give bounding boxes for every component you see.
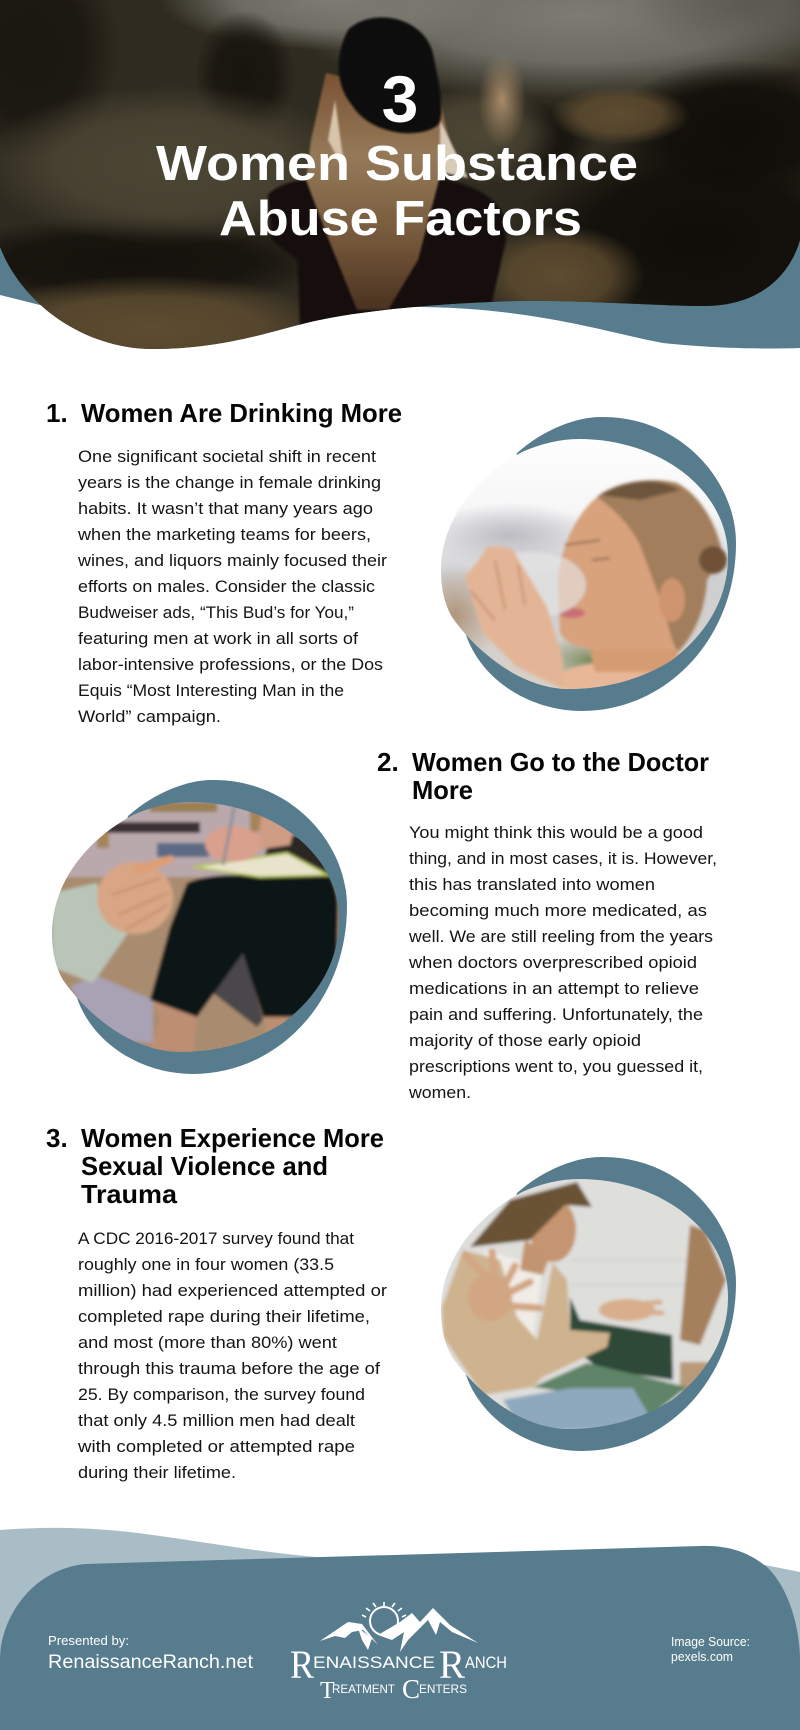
text block: factor 1 body: labor-intensive professions, or the Dos <box>78 655 383 674</box>
text block: factor 3 body: during their lifetime. <box>78 1463 236 1482</box>
logo wordmark: ENAISSANCE <box>313 1653 435 1672</box>
text block: factor 3 body: roughly one in four women (33.5 <box>78 1255 334 1274</box>
logo wordmark <box>290 1642 507 1704</box>
text block: factor 1 body <box>77 447 387 726</box>
icon: sun and mountains <box>320 1602 478 1652</box>
title: Abuse Factors <box>219 192 582 246</box>
text block: factor 1 body: habits. It wasn’t that many years ago <box>78 499 373 518</box>
heading: women go to the doctor more <box>377 747 709 805</box>
heading: women go to the doctor more: Women Go to the Doctor <box>412 747 709 777</box>
heading: women experience more sexual violence and trauma: Women Experience More <box>81 1123 384 1153</box>
logo wordmark: C <box>402 1674 420 1704</box>
teal wave behind header <box>0 200 800 348</box>
footer panel <box>0 1546 800 1730</box>
text block: factor 1 body: when the marketing teams for beers, <box>77 525 371 544</box>
text block: factor 1 body: World” campaign. <box>78 707 221 726</box>
title <box>156 62 638 246</box>
text block: factor 3 body: A CDC 2016-2017 survey found that <box>78 1229 354 1248</box>
heading: women experience more sexual violence and trauma: Sexual Violence and <box>81 1151 328 1181</box>
logo: Renaissance Ranch Treatment Centers <box>290 1602 507 1704</box>
text block: factor 2 body: majority of those early opioid <box>409 1031 641 1050</box>
heading: women are drinking more: 1. <box>46 398 68 428</box>
text block: factor 1 body: Budweiser ads, “This Bud’s for You,” <box>78 603 354 622</box>
text block: factor 2 body: when doctors overprescribed opioid <box>408 953 697 972</box>
text block: factor 2 body: well. We are still reeling from the years <box>408 927 713 946</box>
text block: factor 3 body: completed rape during their lifetime, <box>78 1307 370 1326</box>
panel: factor 3 text <box>46 1123 387 1482</box>
presented by text: Presented by: <box>48 1633 129 1648</box>
logo wordmark: ANCH <box>465 1653 507 1672</box>
text block: factor 3 body: with completed or attempted rape <box>77 1437 355 1456</box>
text block: factor 1 body: One significant societal shift in recent <box>78 447 376 466</box>
panel: factor 1 text <box>46 398 402 726</box>
woman <box>268 178 506 330</box>
text block: factor 2 body: pain and suffering. Unfortunately, the <box>409 1005 703 1024</box>
text block: factor 3 body: and most (more than 80%) went <box>78 1333 337 1352</box>
image: distressed woman on green sofa <box>430 1157 740 1451</box>
heading: women go to the doctor more: 2. <box>377 747 399 777</box>
image: woman drinking water <box>441 417 736 711</box>
text block: factor 2 body: thing, and in most cases, it is. However, <box>409 849 717 868</box>
text block: factor 2 body <box>408 823 717 1102</box>
text block: factor 2 body: medications in an attempt to relieve <box>409 979 699 998</box>
text block: factor 2 body: becoming much more medicated, as <box>409 901 707 920</box>
image: therapist writing notes with client <box>40 780 350 1074</box>
text block: factor 2 body: this has translated into women <box>409 875 655 894</box>
text block: factor 3 body: million) had experienced attempted or <box>78 1281 387 1300</box>
text block: factor 1 body: efforts on males. Consider the classic <box>78 577 376 596</box>
title: Women Substance <box>156 137 638 191</box>
heading: women go to the doctor more: More <box>412 775 473 805</box>
text block: factor 2 body: You might think this would be a good <box>409 823 703 842</box>
text block: factor 1 body: years is the change in female drinking <box>78 473 381 492</box>
logo wordmark: ENTERS <box>419 1682 467 1696</box>
text block: factor 1 body: Equis “Most Interesting Man in the <box>78 681 344 700</box>
text block: factor 1 body: wines, and liquors mainly focused their <box>77 551 387 570</box>
text block: factor 2 body: women. <box>408 1083 471 1102</box>
panel: factor 2 text <box>377 747 717 1102</box>
text block: factor 2 body: prescriptions went to, you guessed it, <box>409 1057 703 1076</box>
title: 3 <box>382 62 418 136</box>
logo wordmark: R <box>290 1642 314 1687</box>
presented by text: RenaissanceRanch.net <box>48 1651 254 1673</box>
text block: factor 3 body: through this trauma before the age of <box>78 1359 380 1378</box>
header photo: woman in cap facing forest <box>0 0 800 385</box>
heading: women experience more sexual violence and trauma: 3. <box>46 1123 68 1153</box>
heading: women are drinking more: Women Are Drinking More <box>81 398 402 428</box>
heading: women experience more sexual violence and trauma: Trauma <box>81 1179 178 1209</box>
text block: factor 3 body: that only 4.5 million men had dealt <box>78 1411 355 1430</box>
heading: women experience more sexual violence and trauma <box>46 1123 384 1209</box>
presented by text <box>48 1633 254 1673</box>
logo wordmark: REATMENT <box>332 1682 396 1696</box>
text block: factor 3 body: 25. By comparison, the survey found <box>78 1385 365 1404</box>
text block: factor 3 body <box>77 1229 387 1482</box>
text block: factor 1 body: featuring men at work in all sorts of <box>78 629 358 648</box>
footer light wave <box>0 1528 800 1730</box>
logo wordmark: T <box>320 1678 335 1704</box>
logo wordmark: R <box>439 1642 465 1687</box>
image source text: pexels.com <box>671 1650 733 1664</box>
image source text <box>671 1635 750 1664</box>
image source text: Image Source: <box>671 1635 750 1649</box>
